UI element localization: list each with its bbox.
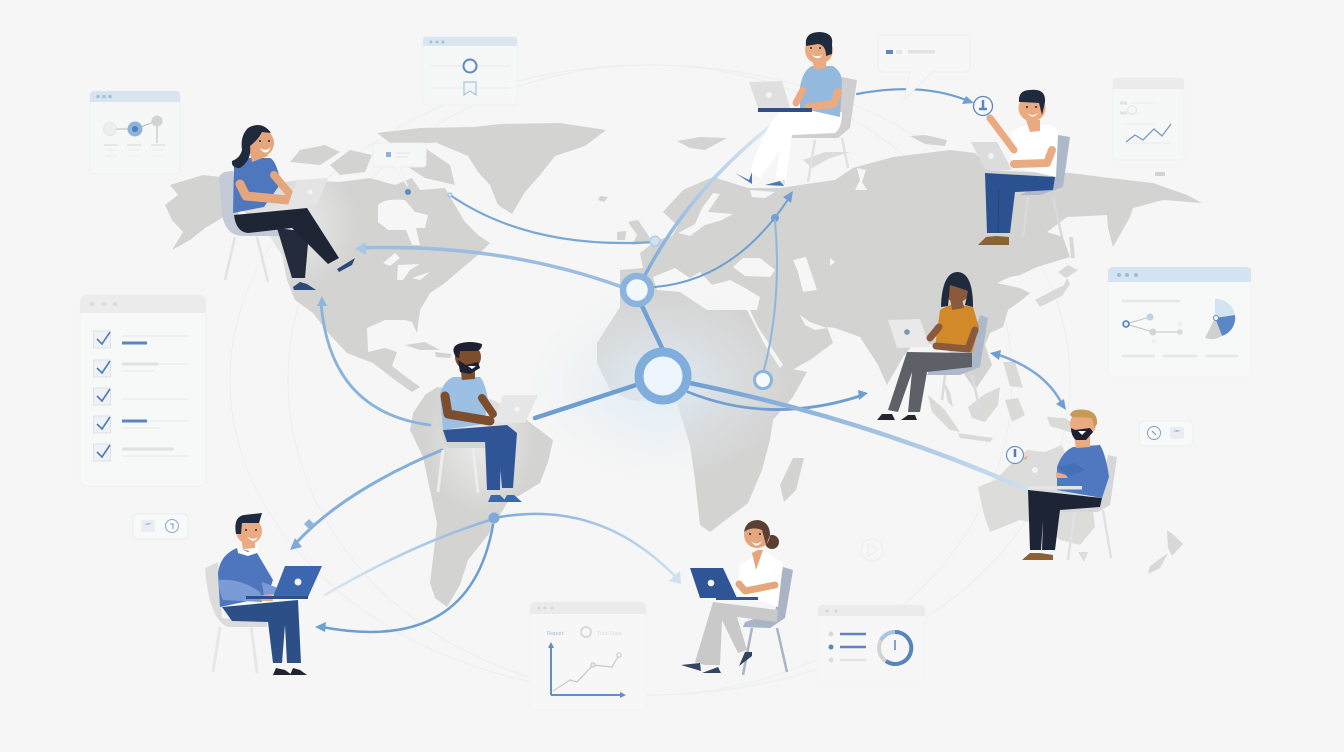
- pie chart: [1205, 299, 1235, 339]
- figure: bearded man right bottom: [1006, 410, 1117, 560]
- connector: hub to hub: [642, 306, 663, 350]
- map: caribbean: [405, 342, 452, 358]
- connector: buenos aires to lower left: [325, 520, 490, 595]
- donut clock: [879, 632, 911, 664]
- icon: play button: [861, 539, 883, 561]
- callout: top speech bubble: [878, 35, 970, 100]
- figure: man top center: [735, 32, 857, 186]
- chart labels: Report: [547, 631, 564, 637]
- panel: line chart window: [530, 602, 646, 710]
- hub: north africa: [623, 276, 651, 304]
- panel: trend chart window: [1113, 78, 1184, 160]
- arrow: buenos aires to bottom figure: [488, 512, 681, 584]
- map: novaya zemlya: [803, 152, 850, 168]
- central glow: [530, 290, 790, 480]
- world map: [165, 123, 1202, 607]
- hub: main: [639, 352, 687, 400]
- arrow: south america figure to lower left figure: [290, 450, 442, 550]
- figure: woman right: [877, 272, 988, 420]
- map: north america: [165, 175, 490, 392]
- arrow: main hub to india: [688, 390, 868, 410]
- arrow: double headed asia to australia: [990, 350, 1066, 410]
- map: southeast asia: [928, 362, 1085, 442]
- figure: man center: [435, 342, 538, 502]
- figure: man bottom left: [205, 513, 322, 675]
- figure: woman top left: [219, 125, 355, 290]
- panel: small icon pill right: “”: [1174, 429, 1180, 438]
- map: eurasia: [620, 150, 1202, 390]
- panel: badge window: [423, 37, 517, 105]
- panel: small icon pill left: “”: [145, 522, 151, 531]
- arrow: hub up to top figure: [645, 125, 772, 275]
- figure: man top right: [971, 90, 1070, 245]
- panel: network diagram window: [90, 91, 180, 174]
- map: seas and lakes: [378, 168, 867, 368]
- arrow: buenos aires to lower left bottom: [315, 525, 493, 632]
- arrow: main hub to australia: [690, 383, 1028, 490]
- chart labels: Total Data: [597, 631, 623, 637]
- arrow: south america figure to north america: [317, 296, 430, 425]
- map: south america: [410, 387, 553, 607]
- map: british isles: [617, 220, 650, 245]
- callout: map location bubble: [373, 143, 426, 195]
- connector: main hub to south america figure: [535, 385, 636, 418]
- connection lines and hubs: [290, 89, 1066, 632]
- arrow: east africa node to russia: [764, 220, 777, 370]
- arrow: hub to north america: [355, 242, 622, 287]
- map: madagascar: [780, 458, 804, 502]
- panel: checklist window: [80, 295, 206, 486]
- panel: clock window: [818, 605, 925, 681]
- map: greenland: [437, 123, 606, 214]
- panel: analytics pie window: [1108, 267, 1251, 377]
- checklist rows: [94, 331, 188, 461]
- arrow: top figure to top right figure: [857, 89, 974, 104]
- arrow: canada to europe: [448, 193, 660, 246]
- soft halos behind figures: [220, 160, 535, 515]
- map: africa: [597, 270, 807, 532]
- hub: east africa: [754, 372, 772, 388]
- panel: small icon pill right: [1139, 421, 1193, 446]
- map: arctic islands: [290, 127, 473, 185]
- map: northern islands: [598, 135, 1165, 202]
- chart labels: [547, 627, 623, 637]
- faint globe arcs: [230, 65, 1070, 695]
- map: japan: [1035, 237, 1078, 307]
- map: australia: [978, 445, 1095, 562]
- panel: small icon pill left: [133, 514, 188, 539]
- arrow: hub to russia: [655, 191, 793, 287]
- map: new zealand: [1148, 530, 1183, 574]
- figure: woman bottom center: [681, 520, 793, 675]
